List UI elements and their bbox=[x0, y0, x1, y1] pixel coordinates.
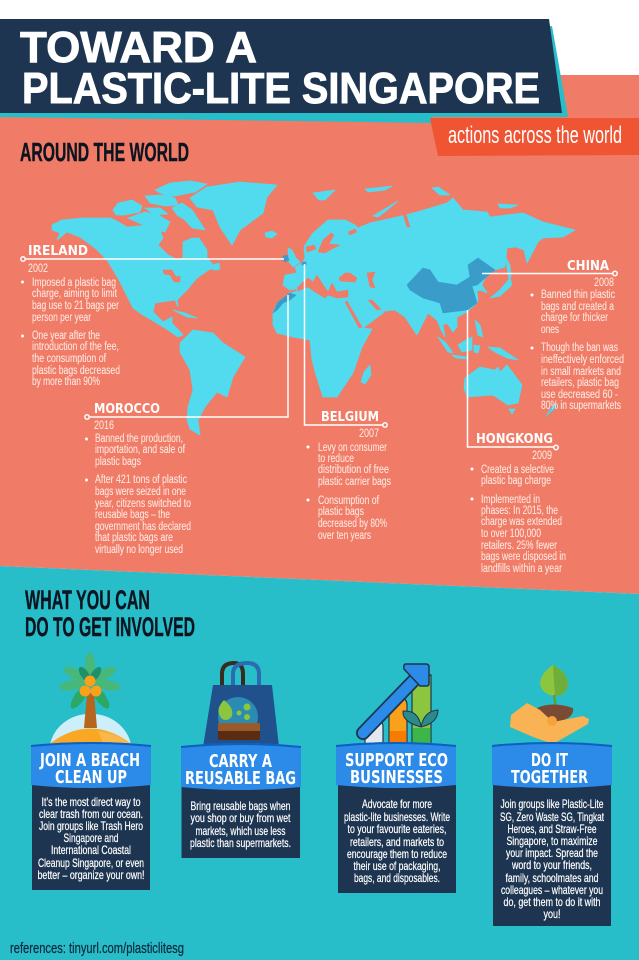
panel: coral world section bbox=[0, 75, 639, 594]
map: greenland bbox=[190, 182, 277, 245]
map: arctic islands bbox=[113, 181, 220, 318]
map: ireland highlighted bbox=[283, 255, 289, 262]
map: belgium highlighted bbox=[302, 262, 306, 265]
callout: ireland bbox=[21, 244, 284, 388]
callout: morocco bbox=[85, 295, 288, 556]
callout: belgium: Levy on consumer bbox=[318, 442, 387, 454]
callout: hong kong: phases: In 2015, the bbox=[481, 505, 558, 517]
callout: ireland: IRELAND bbox=[28, 244, 88, 259]
card: do it together: word to your friends, bbox=[511, 858, 592, 872]
callout: belgium: BELGIUM bbox=[321, 410, 379, 425]
icon: rising chart with arrow and plant bbox=[363, 664, 438, 746]
map: asia pacific islands bbox=[438, 258, 518, 360]
icon: reusable bag bbox=[203, 663, 279, 747]
callout: morocco: Banned the production, bbox=[95, 433, 183, 445]
icon: palm island bbox=[48, 653, 133, 745]
card: do it together: your impact. Spread the bbox=[506, 846, 598, 860]
callout: hong kong: plastic bag charge bbox=[481, 475, 551, 487]
callout: ireland: person per year bbox=[32, 312, 91, 324]
callout: ireland: the consumption of bbox=[32, 353, 107, 365]
callout: china: ones bbox=[541, 324, 559, 336]
callout: ireland: introduction of the fee, bbox=[32, 341, 119, 353]
card: support eco businesses: plastic-lite businesses. Write bbox=[344, 810, 450, 824]
callout: hong kong: to over 100,000 bbox=[481, 528, 541, 540]
title: PLASTIC-LITE SINGAPORE bbox=[22, 64, 540, 113]
map: morocco highlighted bbox=[273, 293, 296, 313]
card: do it together: do, get them to do it with bbox=[504, 895, 600, 909]
card: beach clean up: International Coastal bbox=[51, 843, 131, 857]
callout: morocco: virtually no longer used bbox=[95, 544, 183, 556]
map: great lakes bbox=[163, 270, 180, 282]
map: australia bbox=[464, 365, 522, 405]
callout: hong kong: Created a selective bbox=[481, 464, 554, 476]
callout: china: CHINA bbox=[567, 259, 609, 274]
callout: hong kong: charge was extended bbox=[481, 516, 562, 528]
callout: ireland: bag use to 21 bags per bbox=[32, 300, 119, 312]
card: carry a reusable bag: REUSABLE BAG bbox=[185, 768, 296, 789]
card: do it together: DO IT bbox=[531, 750, 568, 771]
header banner bbox=[0, 19, 568, 123]
panel: teal action section bbox=[0, 566, 639, 960]
callout: china bbox=[482, 259, 624, 412]
map: north america bbox=[52, 218, 218, 337]
callout: hong kong: landfills within a year bbox=[481, 563, 562, 575]
card: support eco businesses: to your favourite eateries, bbox=[348, 822, 446, 836]
card: carry a reusable bag: plastic than supermarkets. bbox=[190, 836, 291, 850]
card: carry a reusable bag: CARRY A bbox=[209, 751, 272, 772]
callout: belgium: plastic bags bbox=[318, 506, 364, 518]
callout: ireland: Imposed a plastic bag bbox=[32, 277, 116, 289]
map: british isles bbox=[288, 248, 300, 267]
callout: belgium: plastic carrier bags bbox=[318, 476, 391, 488]
card: support eco businesses: bags, and disposables. bbox=[354, 871, 440, 885]
card: beach clean up bbox=[31, 742, 151, 890]
callout: morocco: plastic bags bbox=[95, 456, 141, 468]
callout: morocco: bags were seized in one bbox=[95, 486, 186, 498]
callout: morocco: After 421 tons of plastic bbox=[95, 474, 187, 486]
callout: hong kong: Implemented in bbox=[481, 494, 540, 506]
map: arctic russian islands bbox=[313, 186, 518, 217]
callout: china: bags and created a bbox=[541, 301, 614, 313]
callout: china: Banned thin plastic bbox=[541, 289, 615, 301]
callout: morocco: MOROCCO bbox=[94, 402, 160, 417]
callout: ireland: 2002 bbox=[28, 263, 48, 275]
card: beach clean up: Singapore and bbox=[64, 831, 118, 845]
card: support eco businesses: SUPPORT ECO bbox=[345, 750, 448, 771]
callout: china: use decreased 60 - bbox=[541, 389, 618, 401]
card: do it together: TOGETHER bbox=[511, 767, 588, 788]
callout: morocco: reusable bags – the bbox=[95, 509, 170, 521]
callout: hong kong bbox=[468, 310, 566, 575]
card: support eco businesses: their use of packaging, bbox=[354, 859, 440, 873]
references: references: tinyurl.com/plasticlitesg bbox=[10, 940, 184, 957]
card: do it together bbox=[492, 742, 612, 926]
callout: morocco: that plastic bags are bbox=[95, 532, 173, 544]
callout: belgium: to reduce bbox=[318, 453, 354, 465]
callout: china: charge for thicker bbox=[541, 312, 608, 324]
callout: hong kong: retailers. 25% fewer bbox=[481, 540, 557, 552]
card: carry a reusable bag: markets, which use less bbox=[196, 824, 286, 838]
card: support eco businesses: Advocate for more bbox=[362, 797, 432, 811]
title bbox=[20, 23, 540, 113]
card: carry a reusable bag: Bring reusable bags when bbox=[190, 799, 290, 813]
map: eurasia bbox=[283, 198, 575, 337]
card: do it together: colleagues – whatever you bbox=[501, 883, 603, 897]
card: beach clean up: better – organize your own! bbox=[38, 868, 144, 882]
map: new zealand bbox=[545, 403, 557, 418]
callout: ireland: charge, aiming to limit bbox=[32, 288, 118, 300]
card: beach clean up: Cleanup Singapore, or even bbox=[38, 856, 144, 870]
callout: ireland: plastic bags decreased bbox=[32, 365, 120, 377]
card: support eco businesses: BUSINESSES bbox=[350, 767, 443, 788]
subtitle tag bbox=[430, 118, 639, 156]
callout: hong kong: HONGKONG bbox=[476, 432, 553, 447]
callout: morocco: year, citizens switched to bbox=[95, 498, 191, 510]
map: south america bbox=[180, 330, 245, 435]
card: beach clean up: It’s the most direct way to bbox=[42, 795, 141, 809]
icon: hands holding seedling bbox=[510, 665, 589, 744]
callout: belgium: distribution of free bbox=[318, 464, 389, 476]
card: do it together: family, schoolmates and bbox=[506, 871, 598, 885]
callout: morocco: 2016 bbox=[94, 420, 114, 432]
callout: belgium: Consumption of bbox=[318, 495, 380, 507]
map: iceland bbox=[265, 231, 277, 238]
title: TOWARD A bbox=[20, 23, 257, 72]
callout: morocco: government has declared bbox=[95, 521, 191, 533]
card: beach clean up: JOIN A BEACH bbox=[39, 750, 140, 771]
card: support eco businesses: encourage them to reduce bbox=[347, 847, 447, 861]
map: africa bbox=[273, 291, 372, 397]
callout: belgium: 2007 bbox=[359, 428, 379, 440]
card: beach clean up: clear trash from our ocean. bbox=[39, 807, 143, 821]
heading: around the world: AROUND THE WORLD bbox=[20, 137, 189, 167]
heading: what you can do: WHAT YOU CAN bbox=[25, 585, 150, 615]
card: carry a reusable bag bbox=[181, 743, 301, 858]
map: seas bbox=[297, 214, 410, 328]
callout: hong kong: bags were disposed in bbox=[481, 551, 566, 563]
map: madagascar bbox=[361, 365, 371, 384]
card: carry a reusable bag: you shop or buy from wet bbox=[190, 811, 291, 825]
callout: belgium: over ten years bbox=[318, 530, 371, 542]
heading: what you can do bbox=[25, 585, 195, 642]
card: do it together: you! bbox=[544, 907, 560, 921]
callout: ireland: by more than 90% bbox=[32, 376, 100, 388]
callout: hong kong: 2009 bbox=[532, 450, 552, 462]
callout: ireland: One year after the bbox=[32, 330, 100, 342]
card: beach clean up: Join groups like Trash Hero bbox=[39, 819, 143, 833]
card: support eco businesses bbox=[336, 742, 456, 893]
callout: belgium: decreased by 80% bbox=[318, 518, 387, 530]
callout: belgium bbox=[304, 264, 391, 542]
callout: morocco: importation, and sale of bbox=[95, 444, 186, 456]
card: do it together: Heroes, and Straw-Free bbox=[508, 822, 597, 836]
callout: china: 2008 bbox=[594, 277, 614, 289]
heading: what you can do: DO TO GET INVOLVED bbox=[25, 612, 195, 642]
map: china highlighted bbox=[407, 258, 495, 313]
card: do it together: Singapore, to maximize bbox=[506, 834, 598, 848]
card: support eco businesses: retailers, and markets to bbox=[350, 835, 444, 849]
world map bbox=[52, 181, 575, 435]
card: beach clean up: CLEAN UP bbox=[55, 767, 127, 788]
